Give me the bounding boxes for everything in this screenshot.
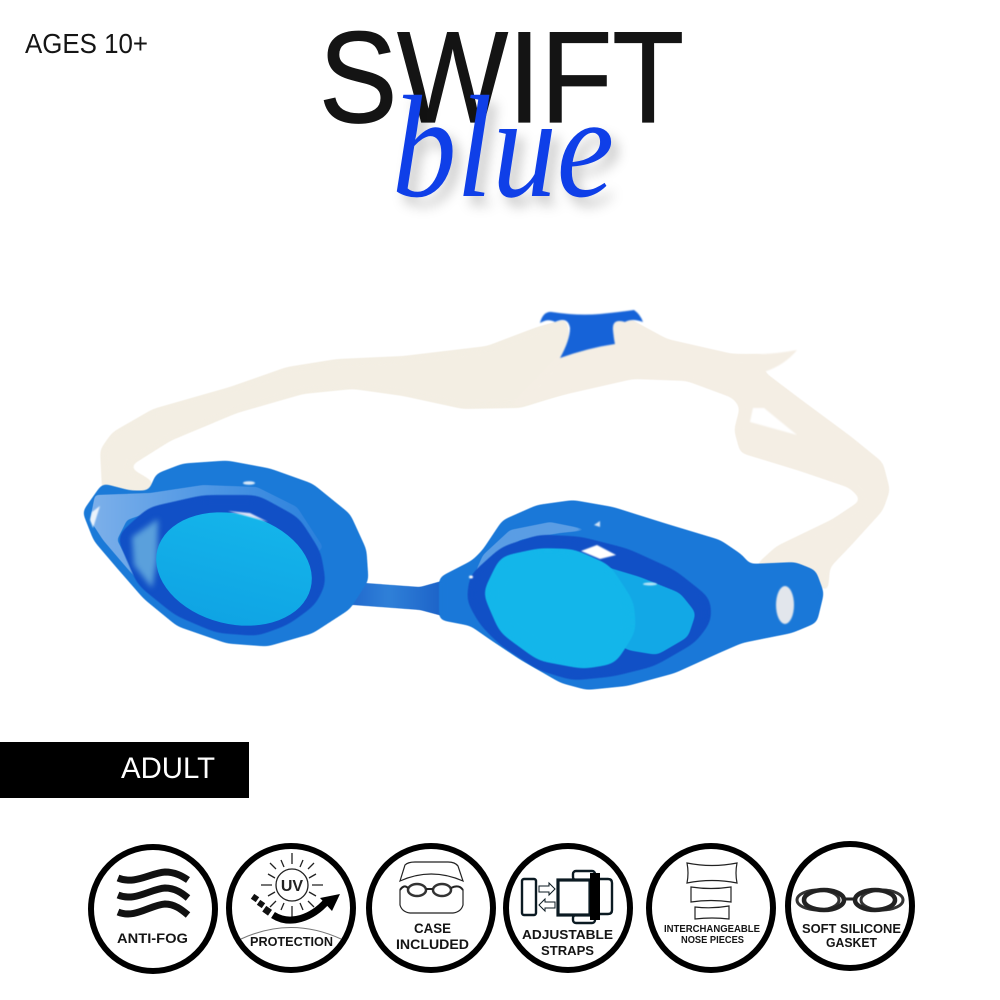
left lens assembly bbox=[84, 462, 367, 645]
icon: strap buckle bbox=[522, 871, 612, 923]
strap opening bbox=[750, 408, 797, 435]
label: INCLUDED bbox=[396, 937, 469, 952]
icon: case with goggles bbox=[400, 862, 463, 913]
size banner bbox=[0, 742, 249, 798]
strap tail tip bbox=[730, 350, 797, 372]
label: SOFT SILICONE bbox=[802, 921, 901, 936]
size label: ADULT bbox=[121, 752, 215, 785]
badge: case included bbox=[369, 846, 493, 970]
left inner light patch bbox=[132, 519, 158, 588]
right lens assembly bbox=[440, 501, 823, 689]
label: GASKET bbox=[826, 935, 877, 950]
label: CASE bbox=[414, 921, 451, 936]
hinge dot bbox=[776, 586, 794, 624]
right rear lens bbox=[570, 556, 696, 655]
label: ANTI-FOG bbox=[117, 931, 188, 946]
label: STRAPS bbox=[541, 943, 594, 958]
badge: UV protection bbox=[229, 846, 353, 970]
label: PROTECTION bbox=[250, 934, 333, 949]
badge: anti-fog bbox=[91, 847, 215, 971]
label: ADJUSTABLE bbox=[522, 927, 613, 942]
strap clip bbox=[540, 310, 643, 358]
right frame bbox=[470, 538, 708, 677]
left outer shell bbox=[84, 462, 367, 645]
icon: nose pieces bbox=[687, 863, 737, 919]
badge: interchangeable nose pieces bbox=[649, 846, 773, 970]
icon: gasket goggles bbox=[797, 890, 903, 910]
icon: deflected ray arrow bbox=[251, 894, 340, 920]
left frame bbox=[120, 498, 323, 633]
right strap bbox=[510, 316, 889, 592]
right highlights bbox=[469, 521, 657, 586]
bridge bbox=[320, 558, 472, 624]
right outer shell bbox=[440, 501, 823, 689]
label: NOSE PIECES bbox=[681, 935, 744, 946]
UV text: UV bbox=[281, 878, 303, 895]
icon: sun bbox=[261, 853, 323, 917]
left lens bbox=[144, 497, 324, 641]
title: blue script: blue bbox=[392, 66, 614, 228]
badge: adjustable straps bbox=[506, 846, 630, 970]
left highlights bbox=[90, 481, 268, 528]
icon: fog waves bbox=[118, 872, 188, 915]
left light ridge bbox=[90, 485, 323, 587]
right front lens bbox=[487, 552, 632, 665]
right light ridge bbox=[474, 522, 590, 575]
age label: AGES 10+ bbox=[25, 28, 148, 59]
label: INTERCHANGEABLE bbox=[664, 924, 760, 935]
title: SWIFT: SWIFT bbox=[319, 4, 684, 150]
product photo: goggles bbox=[84, 310, 889, 689]
left strap bbox=[101, 320, 575, 500]
badge: soft silicone gasket bbox=[788, 844, 912, 968]
